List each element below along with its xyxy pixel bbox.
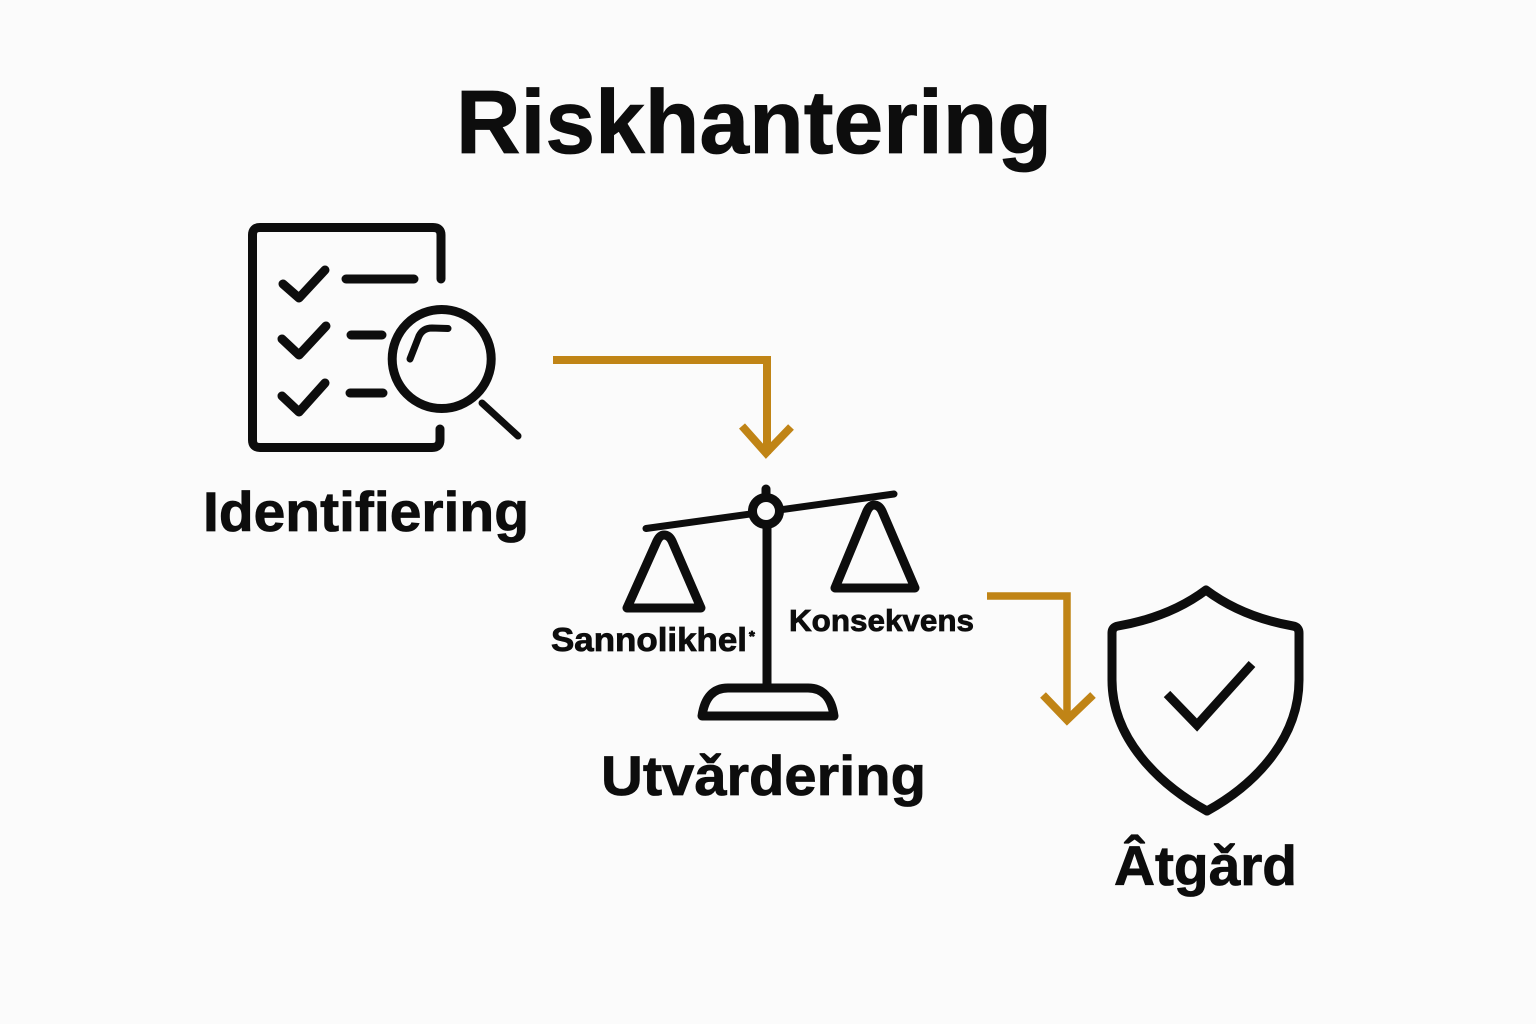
document outline — [252, 228, 441, 448]
magnifier lens — [392, 310, 491, 408]
label: Âtgǎrd: Âtgǎrd — [1114, 834, 1297, 897]
shield check mark — [1167, 664, 1252, 725]
icon: balance scale — [627, 489, 915, 716]
base — [702, 688, 834, 716]
icon: checklist with magnifier — [252, 228, 518, 448]
check marks — [282, 270, 326, 412]
title: Riskhantering — [456, 73, 1052, 173]
label: Sannolikhel: Sannolikhel — [551, 621, 747, 658]
right pan — [835, 505, 915, 588]
pivot nub — [762, 489, 770, 497]
small asterisk mark: * — [749, 628, 755, 645]
icon: shield with check — [1112, 590, 1299, 811]
arrow: identifiering to utvärdering — [553, 360, 791, 454]
beam — [646, 494, 894, 528]
label: Identifiering: Identifiering — [203, 480, 529, 543]
left pan — [627, 535, 701, 608]
arrow: utvärdering to åtgärd — [987, 596, 1093, 720]
shield outline — [1112, 590, 1299, 811]
label: Konsekvens: Konsekvens — [789, 603, 974, 638]
label: Utvǎrdering: Utvǎrdering — [601, 744, 926, 807]
pivot ring — [752, 498, 780, 524]
magnifier handle — [482, 403, 518, 436]
post — [762, 528, 772, 688]
magnifier highlight — [410, 328, 448, 359]
list lines — [346, 279, 414, 393]
